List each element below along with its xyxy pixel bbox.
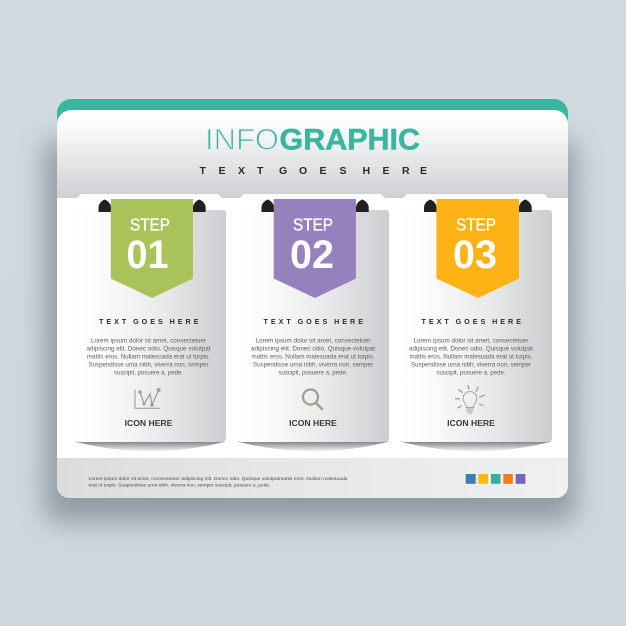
step label: STEP xyxy=(456,214,496,234)
footer text: Lorem ipsum dolor sit amet, consectetuer adipiscing elit. Donec odio. Quisque volutpatmattis eros. Nullam malesuada xyxy=(88,476,348,482)
step number: 03 xyxy=(453,233,497,277)
ribbon ears xyxy=(98,200,206,212)
icon label: ICON HERE xyxy=(289,418,337,428)
infographic card xyxy=(57,99,568,498)
panel bottom shadow xyxy=(400,442,552,451)
panel: step 03 xyxy=(400,194,552,451)
step number: 01 xyxy=(126,233,168,277)
panel: step 01 xyxy=(74,194,226,451)
panel heading: TEXT GOES HERE xyxy=(422,317,521,326)
footer text: erat ut turpis. Suspendisse urna nibh, viverra non, semper suscipit, posuere a, pede. xyxy=(88,482,270,488)
panel body text: mattis eros. Nullam malesuada erat ut turpis. xyxy=(252,354,375,360)
subtitle: TEXT xyxy=(200,165,264,177)
title: INFO xyxy=(205,124,279,156)
icon label: ICON HERE xyxy=(447,418,495,428)
panel body text xyxy=(86,338,211,376)
panel: step 02 xyxy=(237,194,389,451)
panel body text: adipiscing elit. Donec odio. Quisque volutpat xyxy=(251,346,375,352)
panel lip xyxy=(402,194,549,210)
colour swatches xyxy=(466,474,525,484)
panel body text: suscipit, posuere a, pede. xyxy=(436,370,506,376)
panel body text: Lorem ipsum dolor sit amet, consectetuer xyxy=(91,338,207,344)
teal top bar xyxy=(57,99,568,159)
title: GRAPHIC xyxy=(280,124,420,156)
panel body text: mattis eros. Nullam malesuada erat ut turpis. xyxy=(410,354,533,360)
panel bottom shadow xyxy=(237,442,389,451)
icon: light bulb xyxy=(455,385,485,413)
subtitle: GOES xyxy=(279,165,347,177)
panel body text: adipiscing elit. Donec odio. Quisque volutpat xyxy=(86,346,211,352)
icon: line chart xyxy=(135,388,161,408)
ribbon ears xyxy=(424,200,532,212)
title xyxy=(205,124,420,156)
ribbon xyxy=(111,199,193,298)
panel body text: Lorem ipsum dolor sit amet, consectetuer xyxy=(256,338,371,344)
icon: magnifier xyxy=(303,390,322,409)
panel body text: Lorem ipsum dolor sit amet, consectetuer xyxy=(414,338,529,344)
panel sheet xyxy=(400,210,552,442)
white body xyxy=(57,198,568,459)
panel heading: TEXT GOES HERE xyxy=(264,317,363,326)
subtitle: HERE xyxy=(362,165,427,177)
panel lip xyxy=(239,194,386,210)
panel body text: suscipit, posuere a, pede. xyxy=(278,370,348,376)
header band xyxy=(57,110,568,198)
panel heading: TEXT GOES HERE xyxy=(99,317,199,326)
panel body text xyxy=(409,338,533,376)
panel sheet xyxy=(74,210,226,442)
footer text xyxy=(88,476,348,488)
panel body text: Suspendisse urna nibh, viverra non, semper xyxy=(411,362,532,368)
panel body text: suscipit, posuere a, pede. xyxy=(114,370,183,376)
panel bottom shadow xyxy=(74,442,226,451)
panel body text: adipiscing elit. Donec odio. Quisque volutpat xyxy=(409,346,533,352)
panel body text xyxy=(251,338,375,376)
ribbon ears xyxy=(262,200,369,212)
panel lip xyxy=(76,194,223,210)
card shadow xyxy=(44,140,576,522)
step label: STEP xyxy=(293,214,333,234)
ribbon xyxy=(274,199,356,298)
icon label: ICON HERE xyxy=(125,418,173,428)
ribbon xyxy=(436,199,519,298)
step number: 02 xyxy=(290,233,334,277)
footer band xyxy=(57,458,568,498)
panel body text: Suspendisse urna nibh, viverra non, semper xyxy=(88,362,209,368)
panel body text: mattis eros. Nullam malesuada erat ut turpis. xyxy=(87,354,210,360)
panel sheet xyxy=(237,210,389,442)
panel body text: Suspendisse urna nibh, viverra non, semper xyxy=(253,362,374,368)
step label: STEP xyxy=(130,214,170,234)
